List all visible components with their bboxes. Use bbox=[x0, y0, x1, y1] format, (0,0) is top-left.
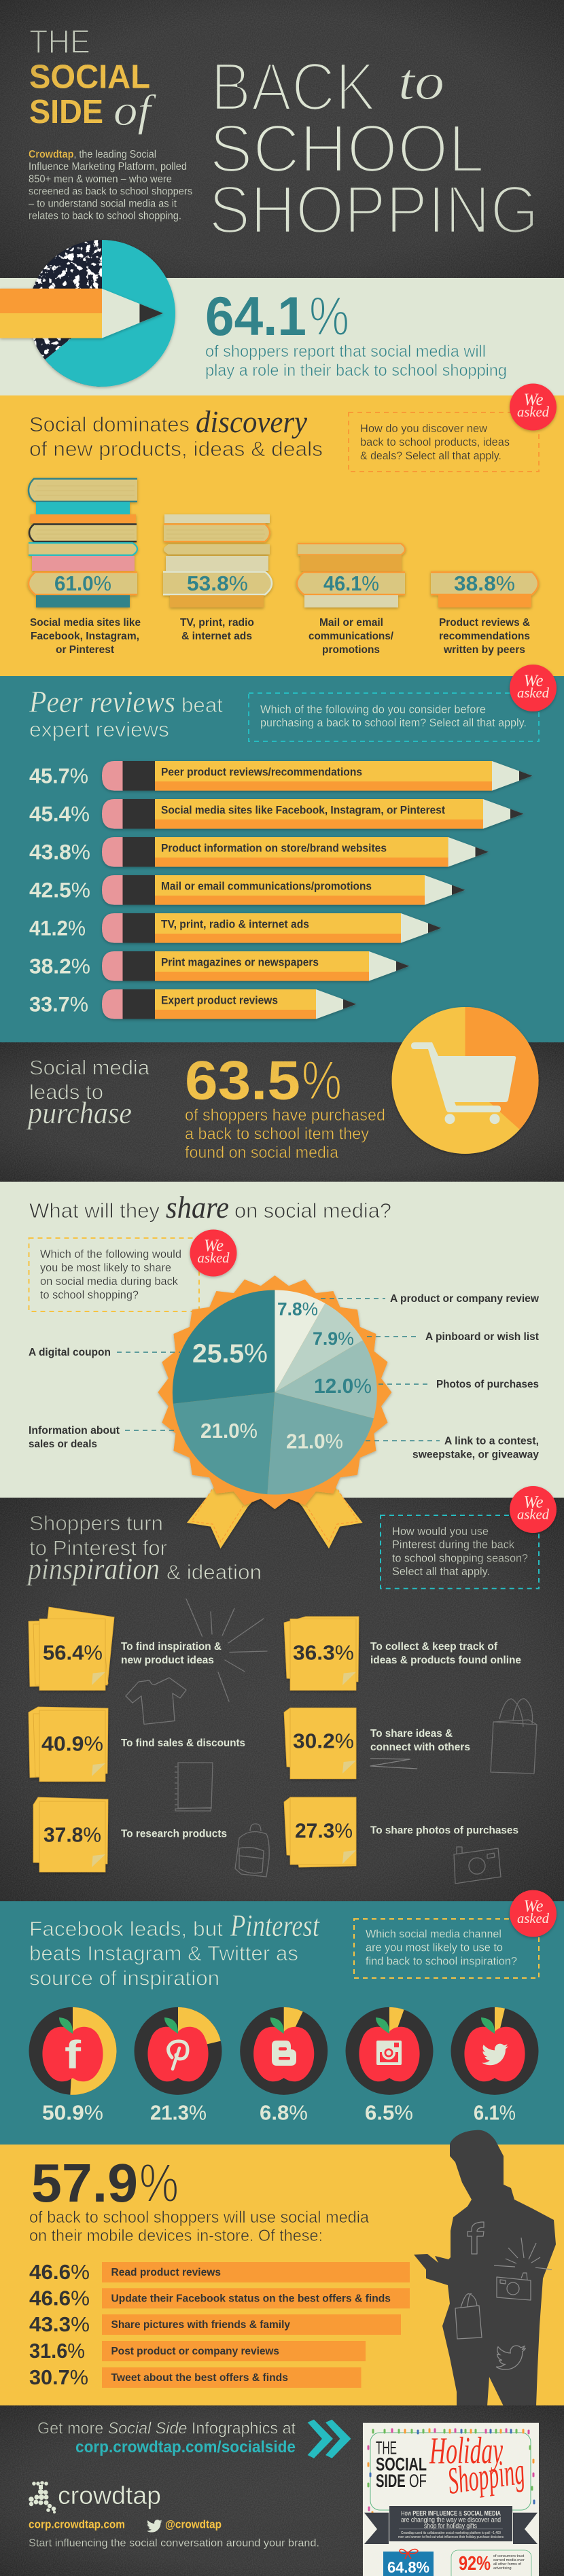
panel: peer reviews section bbox=[0, 676, 564, 1043]
bar: post product reviews bbox=[29, 2339, 366, 2363]
pinterest use labels: ideas & products found online bbox=[370, 1655, 521, 1666]
question text: to school shopping season? bbox=[392, 1552, 528, 1564]
book stack 53.8 percent bbox=[163, 514, 272, 607]
panel: share section bbox=[0, 1182, 564, 1498]
title: back to school shopping: to bbox=[398, 54, 444, 111]
brand tagline: Start influencing the social conversation around your brand. bbox=[29, 2538, 319, 2549]
apple chart pinterest 21.3 percent: 21.3% bbox=[150, 2100, 207, 2124]
book percentages: 38.8% bbox=[454, 571, 515, 595]
big stat 57.9 percent: % bbox=[139, 2153, 179, 2213]
book labels: Mail or email bbox=[319, 617, 383, 629]
big stat 63.5 percent bbox=[185, 1051, 342, 1112]
book labels: & internet ads bbox=[181, 631, 252, 642]
pencil bar 45.4 percent bbox=[29, 799, 523, 829]
contact links: corp.crowdtap.com bbox=[29, 2519, 125, 2531]
icon: header pencil bbox=[0, 289, 163, 338]
panel: social channels section bbox=[0, 1901, 564, 2145]
chalk doodle: inspiration rays and t-shirt bbox=[126, 1599, 267, 1725]
thumbnail stats: earned media over bbox=[493, 2558, 525, 2562]
bar: update facebook status: Update their Facebook status on the best offers & finds bbox=[111, 2293, 391, 2305]
pencil bar 45.7 percent: Peer product reviews/recommendations bbox=[161, 766, 362, 779]
share pie chart: 21.0% bbox=[286, 1430, 343, 1453]
pencil bar 41.2 percent: TV, print, radio & internet ads bbox=[161, 919, 309, 931]
big stat 63.5 percent: % bbox=[302, 1051, 342, 1112]
book stack 46.1 percent bbox=[297, 544, 405, 607]
pie callouts: sweepstake, or giveaway bbox=[412, 1449, 539, 1461]
sticky note 36.3 percent: 36.3% bbox=[293, 1641, 354, 1665]
bar: tweet offers: 30.7% bbox=[29, 2365, 88, 2389]
heading: peer reviews beat expert reviews: expert reviews bbox=[29, 718, 169, 741]
share pie chart: 21.0% bbox=[200, 1419, 258, 1443]
thumbnail ribbon banner: are changing the way we discover and bbox=[401, 2517, 501, 2524]
apple chart instagram 6.5 percent: 6.5% bbox=[365, 2100, 413, 2124]
apple chart facebook 50.9 percent: f bbox=[65, 2033, 82, 2077]
heading: social dominates discovery: of new products, ideas & deals bbox=[29, 438, 323, 461]
bar: update facebook status: 46.6% bbox=[29, 2286, 90, 2310]
stat description bbox=[205, 342, 507, 380]
title: back to school shopping bbox=[209, 49, 539, 248]
bar: post product reviews: 31.6% bbox=[29, 2339, 85, 2363]
pencil bar 38.2 percent bbox=[29, 951, 409, 981]
chalk doodle: shopping bag and scribble bbox=[370, 1699, 537, 1774]
intro paragraph bbox=[29, 149, 192, 222]
stat description: of shoppers report that social media will bbox=[205, 342, 486, 361]
intro paragraph: Influence Marketing Platform, polled bbox=[29, 161, 187, 173]
panel: header chalkboard bbox=[0, 0, 564, 279]
we asked badge: share: asked bbox=[197, 1250, 230, 1266]
heading: facebook leads but pinterest: Pinterest bbox=[230, 1909, 320, 1943]
share pie chart: 7.8% bbox=[277, 1299, 318, 1320]
book percentages: 61.0% bbox=[54, 571, 111, 595]
question box bbox=[29, 1238, 199, 1311]
share pie chart bbox=[173, 1290, 377, 1495]
book labels: Social media sites like bbox=[30, 617, 141, 629]
heading: facebook leads but pinterest: Facebook leads, but bbox=[29, 1918, 224, 1941]
bar: tweet offers bbox=[29, 2365, 362, 2389]
panel: footer chalkboard bbox=[0, 2405, 564, 2576]
apple chart twitter 6.1 percent bbox=[451, 2007, 538, 2124]
apple chart twitter 6.1 percent: 6.1% bbox=[474, 2100, 516, 2124]
pinterest use labels: To find sales & discounts bbox=[121, 1737, 245, 1749]
we asked badge: social channels: asked bbox=[517, 1910, 549, 1926]
crowdtap logo: crowdtap bbox=[58, 2482, 161, 2509]
question box: Which of the following do you consider before bbox=[260, 704, 486, 716]
stat description: of shoppers have purchased bbox=[185, 1106, 385, 1125]
thumbnail ribbon banner: shop for holiday gifts bbox=[424, 2522, 477, 2530]
thumbnail title: Holiday bbox=[429, 2430, 503, 2472]
book labels bbox=[30, 617, 530, 656]
pencil bar 42.5 percent bbox=[29, 875, 465, 905]
thumbnail stats: of consumers trust bbox=[493, 2554, 525, 2558]
icon: double chevron arrow bbox=[308, 2420, 351, 2458]
heading: social media leads to purchase: leads to bbox=[29, 1081, 103, 1104]
intro paragraph: screened as back to school shoppers bbox=[29, 186, 192, 197]
apple chart facebook 50.9 percent: 50.9% bbox=[42, 2100, 103, 2124]
intro paragraph: relates to back to school shopping. bbox=[29, 211, 181, 222]
book labels: communications/ bbox=[309, 631, 394, 642]
bar: share pictures: Share pictures with friends & family bbox=[111, 2319, 290, 2331]
title: the social side of bbox=[29, 24, 157, 135]
apple chart instagram 6.5 percent bbox=[345, 2007, 434, 2124]
title: back to school shopping: SCHOOL bbox=[209, 111, 484, 187]
panel: purchase section bbox=[0, 1042, 564, 1182]
bar: share pictures: 43.3% bbox=[29, 2312, 90, 2336]
question box: you be most likely to share bbox=[40, 1262, 171, 1274]
contact links: @crowdtap bbox=[165, 2519, 222, 2531]
badge starburst bbox=[158, 1275, 391, 1509]
sticky note 30.2 percent bbox=[284, 1708, 356, 1779]
thumbnail ribbon banner: How PEER INFLUENCE & SOCIAL MEDIA bbox=[401, 2510, 501, 2518]
ribbon tails bbox=[187, 1475, 363, 1549]
pie callouts: Photos of purchases bbox=[436, 1379, 539, 1390]
we asked badge: share: We bbox=[204, 1237, 224, 1255]
big stat 64.1 percent: 64.1 bbox=[205, 286, 306, 347]
pencil bar 41.2 percent: 41.2% bbox=[29, 916, 86, 940]
thumbnail stats: 92% bbox=[459, 2553, 491, 2575]
pencil bar 42.5 percent: 42.5% bbox=[29, 878, 90, 902]
sticky note 37.8 percent bbox=[33, 1797, 108, 1872]
pencil bar 42.5 percent: Mail or email communications/promotions bbox=[161, 881, 372, 893]
panel: 64.1 percent band bbox=[0, 278, 564, 395]
heading: social media leads to purchase: purchase bbox=[26, 1096, 132, 1130]
pinterest use labels: To share photos of purchases bbox=[370, 1825, 518, 1837]
question box: How do you discover new bbox=[360, 423, 487, 435]
book percentages: 46.1% bbox=[323, 571, 379, 595]
share pie chart: 7.9% bbox=[313, 1328, 354, 1349]
intro paragraph: Crowdtap, the leading Social bbox=[29, 149, 156, 160]
bar: post product reviews: Post product or company reviews bbox=[111, 2346, 279, 2357]
question box outline bbox=[381, 1515, 539, 1589]
sticky note 37.8 percent: 37.8% bbox=[43, 1822, 101, 1847]
call to action text: Get more Social Side Infographics at bbox=[37, 2420, 296, 2438]
apple chart blogger 6.8 percent bbox=[240, 2007, 328, 2124]
apple chart facebook 50.9 percent bbox=[29, 2007, 117, 2124]
heading: facebook leads but pinterest bbox=[29, 1909, 320, 1990]
holiday lights bbox=[368, 2429, 534, 2515]
call to action text bbox=[37, 2420, 296, 2456]
heading: shoppers turn to pinterest: pinspiration bbox=[26, 1552, 160, 1586]
question box bbox=[349, 412, 539, 472]
title: the social side of: of bbox=[113, 86, 157, 135]
heading: peer reviews beat expert reviews bbox=[29, 685, 224, 741]
pinterest use labels: To collect & keep track of bbox=[370, 1641, 498, 1653]
pinterest use labels: new product ideas bbox=[121, 1655, 214, 1666]
pie callouts: A digital coupon bbox=[29, 1347, 111, 1358]
pinterest use labels: connect with others bbox=[370, 1742, 470, 1753]
icon: cart pie chart bbox=[391, 1007, 539, 1154]
heading: shoppers turn to pinterest: to Pinterest for bbox=[29, 1536, 167, 1559]
thumbnail title: THE bbox=[376, 2438, 397, 2458]
heading: facebook leads but pinterest: beats Instagram & Twitter as bbox=[29, 1942, 298, 1965]
bar: read product reviews: 46.6% bbox=[29, 2260, 90, 2284]
heading: peer reviews beat expert reviews: beat bbox=[181, 694, 224, 717]
we asked badge: peer reviews: asked bbox=[517, 685, 549, 701]
contact links bbox=[29, 2519, 222, 2533]
bar: share pictures bbox=[29, 2312, 401, 2336]
question box bbox=[354, 1919, 539, 1978]
thumbnail stats bbox=[383, 2549, 531, 2576]
pencil bar 38.2 percent: 38.2% bbox=[29, 954, 90, 978]
panel: mobile in-store section bbox=[0, 2145, 564, 2405]
thumbnail ribbon banner bbox=[364, 2506, 537, 2544]
we asked badge: pinterest: We bbox=[523, 1494, 544, 1511]
pie callouts bbox=[29, 1293, 540, 1461]
question text: How would you use bbox=[392, 1525, 489, 1538]
bar: read product reviews bbox=[29, 2260, 410, 2284]
heading: shoppers turn to pinterest: & ideation bbox=[166, 1561, 262, 1584]
intro paragraph: – to understand social media as it bbox=[29, 198, 177, 209]
question box bbox=[249, 693, 539, 741]
chalk doodle: camera bbox=[454, 1847, 501, 1884]
book percentages bbox=[54, 571, 515, 595]
pinterest use labels: To find inspiration & bbox=[121, 1641, 222, 1653]
we asked badge: social channels: We bbox=[523, 1897, 544, 1916]
pencil bar 45.7 percent bbox=[29, 761, 533, 791]
book stack 38.8 percent bbox=[431, 572, 538, 607]
title: the social side of: SIDE bbox=[29, 94, 103, 130]
book labels: written by peers bbox=[443, 644, 525, 656]
bar: update facebook status bbox=[29, 2286, 410, 2310]
heading: peer reviews beat expert reviews: Peer reviews bbox=[29, 685, 175, 719]
book labels: recommendations bbox=[439, 631, 530, 642]
pinterest use labels: To share ideas & bbox=[370, 1728, 453, 1740]
apple chart pinterest 21.3 percent bbox=[135, 2007, 222, 2124]
chalk doodles on silhouette bbox=[455, 2222, 552, 2339]
pencil bar 33.7 percent: Expert product reviews bbox=[161, 995, 278, 1007]
question text bbox=[392, 1525, 528, 1578]
book percentages: 53.8% bbox=[187, 571, 248, 595]
pencil bar 33.7 percent: 33.7% bbox=[29, 992, 88, 1017]
we asked badge: discovery: asked bbox=[517, 404, 549, 420]
sticky note 56.4 percent bbox=[29, 1607, 114, 1691]
book labels: TV, print, radio bbox=[180, 617, 254, 629]
thumbnail stats: all other forms of bbox=[493, 2562, 521, 2566]
heading: social media leads to purchase: Social media bbox=[29, 1057, 149, 1080]
pinterest use labels bbox=[121, 1641, 521, 1840]
sticky note 56.4 percent: 56.4% bbox=[43, 1641, 103, 1665]
question box: Which social media channel bbox=[366, 1928, 501, 1941]
sticky note 27.3 percent: 27.3% bbox=[295, 1819, 353, 1843]
heading: what will they share bbox=[29, 1190, 391, 1224]
pie callouts: Information about bbox=[29, 1425, 120, 1436]
thumbnail title bbox=[376, 2430, 527, 2503]
question box: back to school products, ideas bbox=[360, 436, 510, 448]
pencil bar 45.7 percent: 45.7% bbox=[29, 764, 88, 788]
we asked badge: pinterest bbox=[510, 1486, 557, 1533]
pie callouts: A link to a contest, bbox=[444, 1436, 539, 1447]
sticky note 30.2 percent: 30.2% bbox=[293, 1729, 354, 1753]
book labels: Facebook, Instagram, bbox=[31, 631, 139, 642]
stat description: a back to school item they bbox=[185, 1125, 369, 1144]
question text: Pinterest during the back bbox=[392, 1538, 515, 1551]
book stack 61.0 percent bbox=[29, 478, 137, 607]
pencil bar 38.2 percent: Print magazines or newspapers bbox=[161, 957, 319, 969]
stat description: found on social media bbox=[185, 1144, 339, 1162]
pie callouts: sales or deals bbox=[29, 1439, 97, 1450]
sticky note 36.3 percent bbox=[284, 1617, 359, 1691]
question box: find back to school inspiration? bbox=[366, 1956, 517, 1968]
thumbnail: holiday shopping infographic bbox=[363, 2423, 539, 2576]
pie callouts: A pinboard or wish list bbox=[425, 1331, 539, 1343]
stat description bbox=[185, 1106, 385, 1162]
heading: shoppers turn to pinterest bbox=[26, 1512, 262, 1586]
heading: social dominates discovery bbox=[29, 405, 323, 461]
big stat 63.5 percent: 63.5 bbox=[185, 1051, 300, 1112]
book labels: or Pinterest bbox=[56, 644, 114, 656]
share pie chart: 25.5% bbox=[192, 1339, 268, 1369]
stat description: play a role in their back to school shopping bbox=[205, 361, 507, 380]
thumbnail stats: 64.8% bbox=[387, 2558, 429, 2576]
silhouette: shopper with phone bbox=[414, 2130, 556, 2406]
big stat 57.9 percent: 57.9 bbox=[31, 2153, 138, 2213]
book labels: Product reviews & bbox=[439, 617, 530, 629]
question box: on social media during back bbox=[40, 1275, 179, 1288]
question box: purchasing a back to school item? Select all that apply. bbox=[260, 717, 527, 729]
sticky note 27.3 percent bbox=[284, 1797, 356, 1867]
chalk doodle: backpack bbox=[235, 1824, 269, 1877]
stat description: on their mobile devices in-store. Of these: bbox=[29, 2227, 323, 2245]
heading: social dominates discovery: Social dominates bbox=[29, 413, 190, 436]
question box: to school shopping? bbox=[40, 1289, 139, 1301]
crowdtap logo bbox=[29, 2481, 161, 2513]
pie callouts: A product or company review bbox=[390, 1293, 540, 1305]
stat description bbox=[29, 2208, 370, 2245]
heading: facebook leads but pinterest: source of inspiration bbox=[29, 1967, 219, 1990]
title: back to school shopping: BACK bbox=[211, 49, 376, 125]
heading: what will they share: share bbox=[166, 1190, 229, 1224]
icon: 64.1 percent notebook pie chart bbox=[27, 238, 175, 389]
we asked badge: discovery: We bbox=[523, 391, 544, 409]
we asked badge: share bbox=[190, 1230, 236, 1276]
thumbnail ribbon banner: Crowdtap used its collaborative social marketing platform to poll ~1,400 bbox=[401, 2531, 501, 2535]
pinterest use labels: To research products bbox=[121, 1829, 227, 1840]
we asked badge: social channels bbox=[510, 1890, 557, 1937]
we asked badge: peer reviews: We bbox=[523, 671, 544, 690]
pencil bar 33.7 percent bbox=[29, 989, 356, 1019]
pencil bar 45.4 percent: Social media sites like Facebook, Instagram, or Pinterest bbox=[161, 805, 445, 817]
chalk doodle: notebook bbox=[175, 1763, 213, 1811]
question box: & deals? Select all that apply. bbox=[360, 450, 501, 462]
thumbnail title: SIDE OF bbox=[376, 2471, 427, 2491]
title: back to school shopping: SHOPPING bbox=[209, 172, 539, 248]
bar: read product reviews: Read product reviews bbox=[111, 2267, 221, 2278]
heading: social media leads to purchase bbox=[26, 1057, 149, 1130]
title: the social side of: SOCIAL bbox=[29, 58, 150, 95]
call to action text: corp.crowdtap.com/socialside bbox=[75, 2438, 296, 2456]
panel: pinterest section background bbox=[0, 1498, 564, 1902]
heading: what will they share: What will they bbox=[29, 1199, 160, 1222]
question box: are you most likely to use to bbox=[366, 1942, 503, 1954]
book labels: promotions bbox=[322, 644, 380, 656]
sticky note 40.9 percent bbox=[29, 1707, 108, 1782]
big stat 64.1 percent: % bbox=[309, 286, 349, 347]
panel: discovery section bbox=[0, 395, 564, 677]
apple chart blogger 6.8 percent: 6.8% bbox=[260, 2100, 308, 2124]
sticky note 40.9 percent: 40.9% bbox=[41, 1731, 103, 1756]
intro paragraph: 850+ men & women – who were bbox=[29, 174, 172, 185]
we asked badge: discovery bbox=[510, 383, 557, 431]
we asked badge: peer reviews bbox=[510, 665, 557, 711]
heading: social dominates discovery: discovery bbox=[196, 405, 307, 439]
pencil bar 43.8 percent: Product information on store/brand websites bbox=[161, 843, 387, 855]
thumbnail title: SOCIAL bbox=[376, 2454, 427, 2475]
share pie chart: 12.0% bbox=[314, 1375, 372, 1398]
pencil bar 41.2 percent bbox=[29, 913, 442, 943]
stat description: of back to school shoppers will use social media bbox=[29, 2208, 370, 2227]
pencil bar 43.8 percent bbox=[29, 837, 489, 867]
pencil bar 45.4 percent: 45.4% bbox=[29, 802, 90, 826]
thumbnail stats: advertising bbox=[493, 2566, 512, 2571]
heading: what will they share: on social media? bbox=[234, 1199, 391, 1222]
thumbnail ribbon banner: men and women to find out what influences their holiday purchase decisions bbox=[398, 2535, 504, 2539]
question box: Which of the following would bbox=[40, 1248, 181, 1260]
bar: tweet offers: Tweet about the best offers & finds bbox=[111, 2372, 288, 2384]
pencil bar 43.8 percent: 43.8% bbox=[29, 840, 90, 864]
title: the social side of: THE bbox=[29, 24, 90, 60]
heading: shoppers turn to pinterest: Shoppers turn bbox=[29, 1512, 163, 1535]
question text: Select all that apply. bbox=[392, 1566, 490, 1578]
we asked badge: pinterest: asked bbox=[517, 1506, 549, 1522]
